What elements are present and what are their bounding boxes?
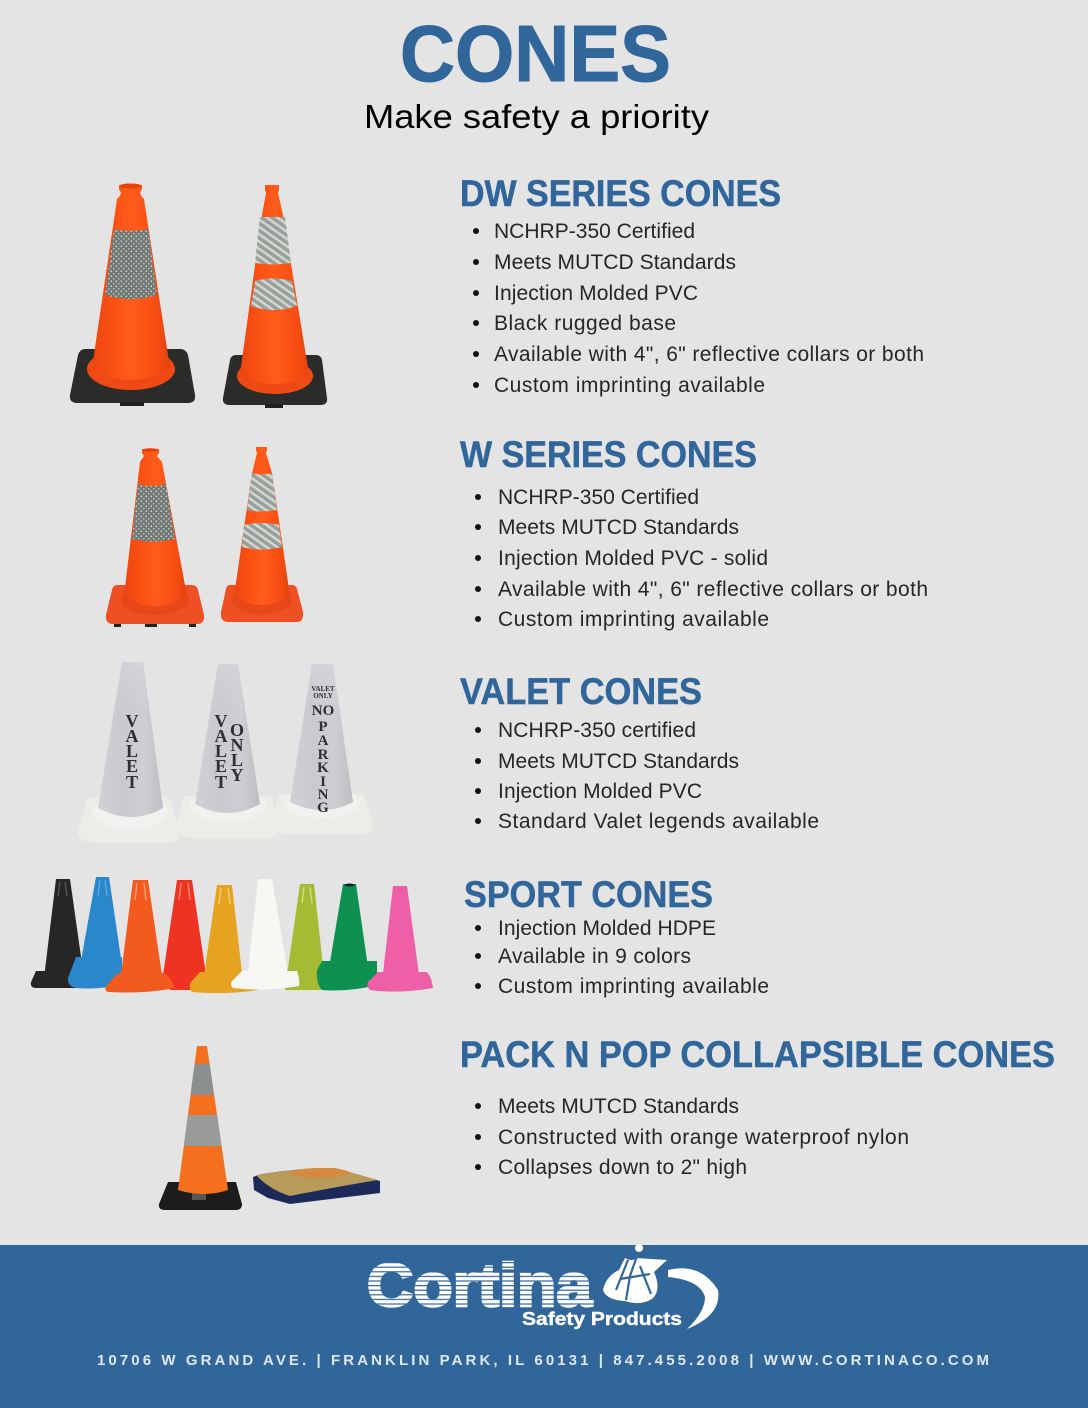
- Valet cone: VALET ONLY: E: [215, 756, 227, 776]
- Valet cone: VALET: L: [126, 741, 138, 761]
- bullet list: Available with 4", 6" reflective collars or both: [498, 578, 928, 601]
- bullet list: [473, 220, 924, 397]
- image: DW series cones: [70, 184, 327, 408]
- Valet cone: NO PARKING: VALET: [311, 685, 335, 693]
- bullet list: [475, 917, 769, 998]
- section: W series text: [460, 434, 928, 631]
- title: CONES: [400, 9, 671, 98]
- Valet cone: VALET ONLY: Y: [230, 765, 244, 785]
- Valet cone: VALET: E: [126, 756, 138, 776]
- Valet cone: VALET ONLY: A: [214, 726, 228, 746]
- bullet list: NCHRP-350 certified: [498, 719, 696, 742]
- W cone two collars: [221, 447, 303, 622]
- DW cone with two collars: [223, 185, 327, 408]
- section: Valet text: [460, 671, 819, 833]
- Valet cone: NO PARKING: P: [318, 719, 328, 735]
- Valet cone: VALET ONLY: [177, 664, 278, 838]
- Valet cone: NO PARKING: K: [317, 760, 329, 776]
- bullet list: Meets MUTCD Standards: [498, 750, 739, 773]
- Valet cone: VALET: T: [126, 772, 138, 792]
- image: Pack N Pop cones: [159, 1046, 380, 1210]
- heading: VALET CONES: [460, 671, 702, 712]
- bullet list: Constructed with orange waterproof nylon: [498, 1126, 909, 1149]
- Valet cone: VALET: A: [126, 726, 138, 746]
- W cone single collar: [106, 448, 204, 627]
- amber cone: [190, 885, 258, 993]
- black cone: [31, 879, 84, 988]
- Valet cone: VALET ONLY: L: [231, 750, 243, 770]
- orange cone: [105, 880, 175, 992]
- Valet cone: NO PARKING: N: [318, 787, 329, 803]
- Valet cone: NO PARKING: NO: [312, 703, 334, 719]
- Valet cone: VALET ONLY: N: [230, 735, 244, 755]
- Valet cone: NO PARKING: I: [320, 774, 326, 790]
- bullet list: Meets MUTCD Standards: [494, 251, 736, 274]
- subtitle: Make safety a priority: [364, 98, 710, 135]
- Valet cone: VALET ONLY: V: [214, 711, 228, 731]
- section: Sport text: [464, 874, 769, 998]
- collapsible cone upright: [159, 1046, 242, 1210]
- red cone: [163, 880, 206, 990]
- Valet cone: VALET ONLY: L: [215, 741, 227, 761]
- bullet list: Injection Molded PVC: [494, 282, 698, 305]
- bullet list: Meets MUTCD Standards: [498, 516, 739, 539]
- DW cone with 6 inch collar: [70, 184, 195, 406]
- bullet list: [475, 486, 928, 631]
- Valet cone: VALET ONLY: T: [215, 772, 227, 792]
- pink cone: [367, 886, 433, 992]
- bullet list: [475, 719, 819, 833]
- heading: SPORT CONES: [464, 874, 713, 915]
- bullet list: Injection Molded PVC: [498, 780, 702, 803]
- bullet list: [475, 1095, 909, 1179]
- lime cone: [285, 884, 325, 990]
- heading: W SERIES CONES: [460, 434, 757, 475]
- Valet cone: NO PARKING: A: [318, 733, 329, 749]
- Valet cone: NO PARKING: G: [317, 800, 329, 816]
- Valet cone: VALET: V: [126, 711, 138, 731]
- bullet list: Collapses down to 2" high: [498, 1156, 747, 1179]
- green cone: [317, 884, 377, 990]
- image: Valet cones: [78, 662, 373, 843]
- heading: DW SERIES CONES: [460, 173, 781, 214]
- footer band: [0, 1244, 1088, 1408]
- bullet list: Meets MUTCD Standards: [498, 1095, 739, 1118]
- bullet list: Standard Valet legends available: [498, 810, 819, 833]
- bullet list: Available with 4", 6" reflective collars or both: [494, 343, 924, 366]
- logo: Cortina Safety Products: Cortina: [367, 1252, 593, 1319]
- blue cone: [68, 877, 123, 988]
- contact line: 10706 W GRAND AVE. | FRANKLIN PARK, IL 60131 | 847.455.2008 | WWW.CORTINACO.COM: [97, 1352, 989, 1369]
- white cone: [231, 879, 299, 990]
- logo: Cortina Safety Products: [362, 1244, 718, 1329]
- bullet list: Injection Molded PVC - solid: [498, 547, 768, 570]
- logo: Cortina Safety Products: Safety Products: [522, 1309, 682, 1329]
- Valet cone: NO PARKING: R: [318, 747, 329, 763]
- heading: PACK N POP COLLAPSIBLE CONES: [460, 1034, 1055, 1075]
- Valet cone: VALET ONLY: O: [230, 720, 244, 740]
- image: Sport cones in 9 colors: [31, 877, 433, 993]
- collapsed cone bag: [253, 1168, 380, 1204]
- Valet cone: NO PARKING: ONLY: [313, 692, 333, 700]
- bullet list: Available in 9 colors: [498, 945, 691, 968]
- section: DW series text: [460, 173, 924, 397]
- bullet list: Custom imprinting available: [494, 374, 765, 397]
- bullet list: Custom imprinting available: [498, 608, 769, 631]
- Valet cone: VALET: [78, 662, 180, 843]
- Valet cone: NO PARKING: [272, 664, 373, 834]
- bullet list: Black rugged base: [494, 312, 676, 335]
- bullet list: NCHRP-350 Certified: [498, 486, 699, 509]
- bullet list: NCHRP-350 Certified: [494, 220, 695, 243]
- image: W series cones: [106, 447, 303, 627]
- section: Pack N Pop text: [460, 1034, 1055, 1179]
- bullet list: Custom imprinting available: [498, 975, 769, 998]
- bullet list: Injection Molded HDPE: [498, 917, 716, 940]
